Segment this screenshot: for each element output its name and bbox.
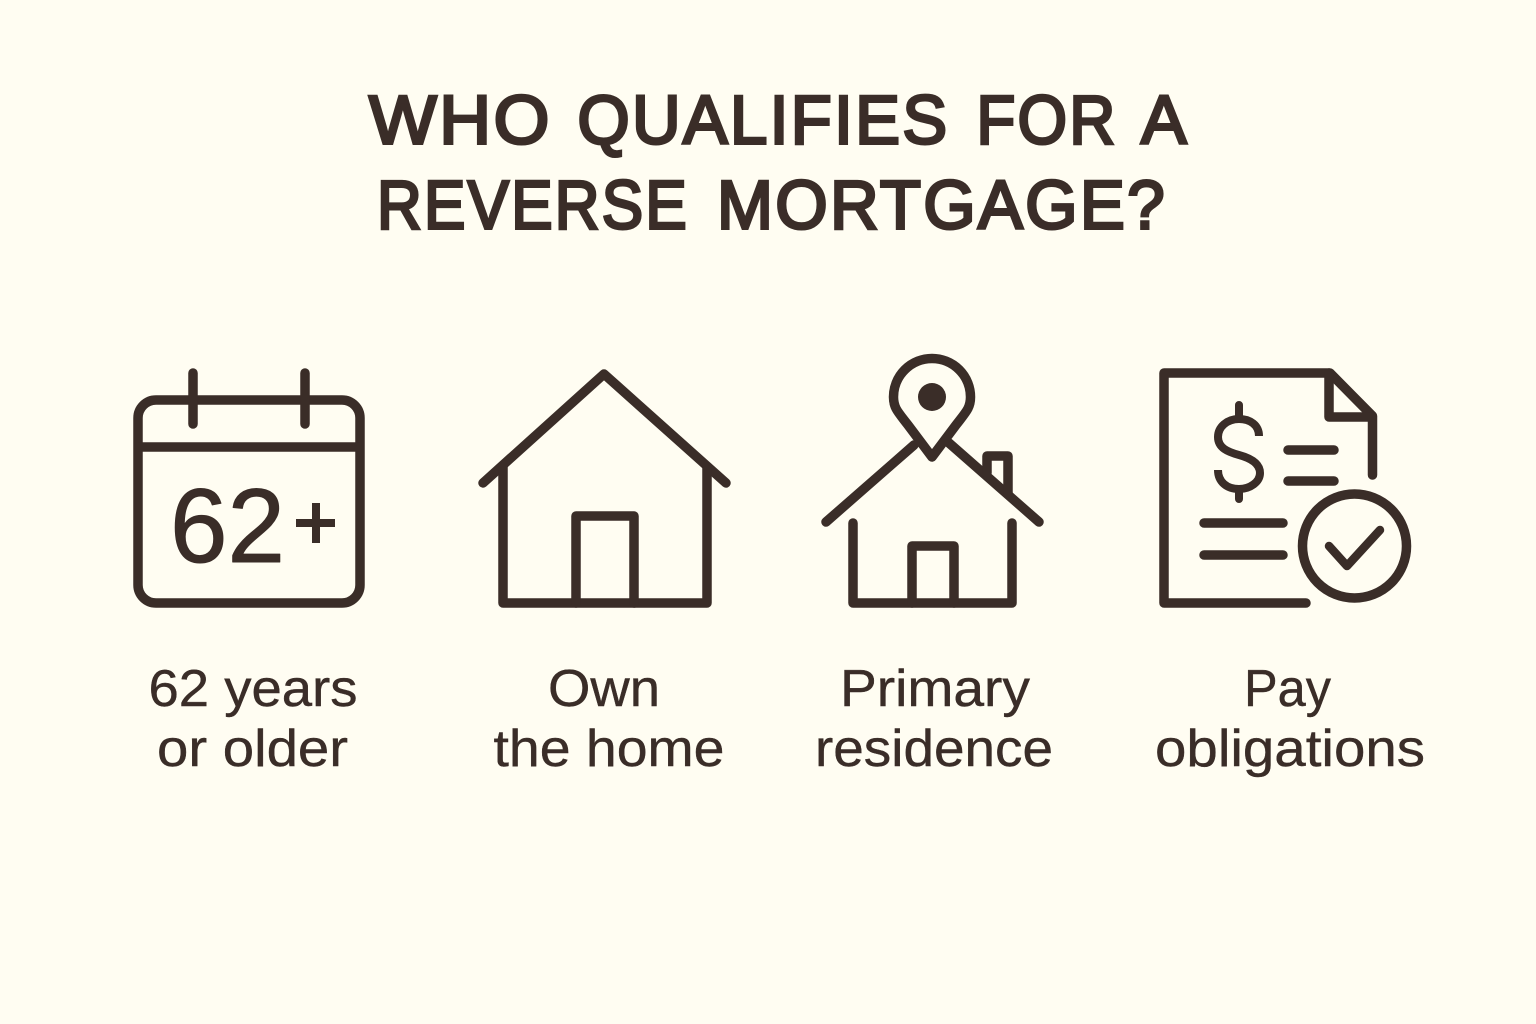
title: A — [1141, 82, 1189, 158]
icon: calendar 62+ — [138, 373, 360, 603]
title: FOR — [976, 82, 1118, 158]
title: REVERSE — [377, 166, 689, 244]
icon: house with location pin — [826, 358, 1039, 603]
icon: calendar 62+: 62 — [170, 468, 285, 585]
title: MORTGAGE? — [717, 166, 1167, 244]
label: own the home: the home — [494, 720, 724, 778]
title: QUALIFIES — [578, 82, 950, 158]
label: pay obligations: obligations — [1155, 720, 1425, 778]
label: 62 years or older: 62 years — [148, 660, 358, 718]
label: primary residence: Primary — [840, 660, 1030, 718]
title — [369, 82, 1189, 244]
icon: document with dollar sign and check — [1164, 373, 1406, 603]
label: own the home — [494, 660, 724, 778]
label: primary residence: residence — [815, 720, 1053, 778]
title: WHO — [369, 82, 552, 158]
label: 62 years or older — [148, 660, 358, 778]
label: own the home: Own — [548, 660, 660, 718]
icon: house — [483, 374, 726, 603]
label: pay obligations: Pay — [1244, 660, 1331, 718]
label: primary residence — [815, 660, 1053, 778]
label: 62 years or older: or older — [157, 720, 348, 778]
label: pay obligations — [1155, 660, 1425, 778]
